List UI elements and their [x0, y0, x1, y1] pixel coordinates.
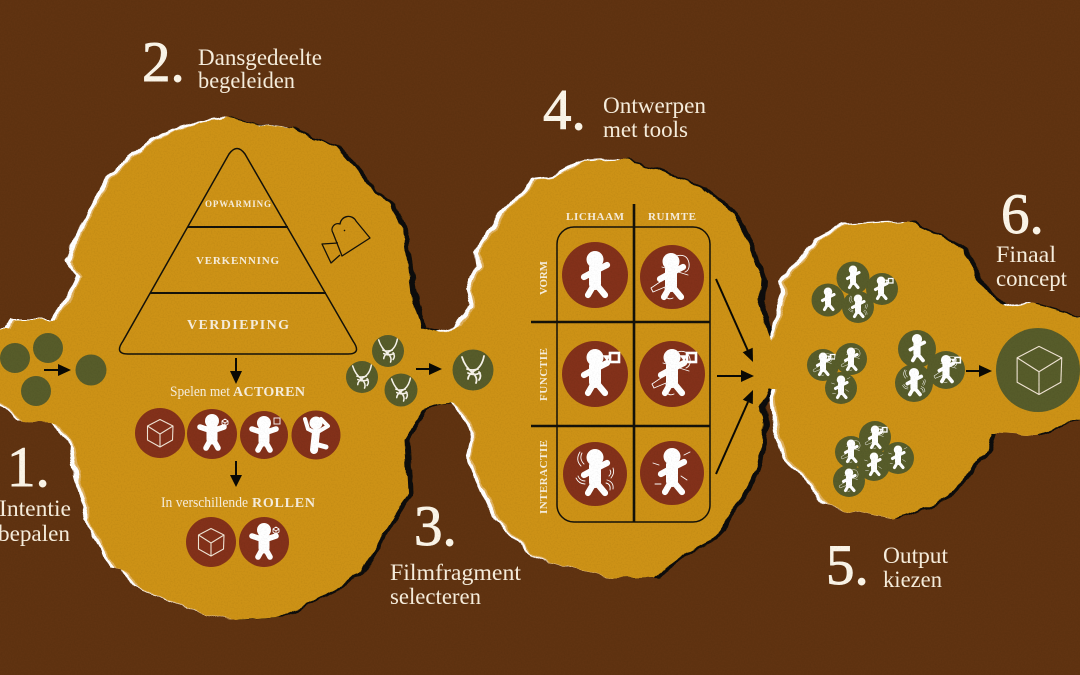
- actor: dancing person: [292, 410, 340, 460]
- arrow: intention: [44, 364, 71, 376]
- arrow: output to concept: [966, 365, 992, 377]
- step 2 heading: begeleiden: [198, 68, 295, 93]
- step 6 heading: Finaal: [996, 242, 1056, 267]
- arrow: pyramid to actors: [230, 358, 242, 384]
- cell: space interaction: [640, 441, 704, 505]
- step 6 heading: 6.: [1001, 183, 1044, 246]
- actor: person with cube: [187, 409, 237, 459]
- step 3 heading: selecteren: [390, 584, 481, 609]
- cell: space function: [639, 341, 705, 407]
- step 4 heading: met tools: [603, 117, 688, 142]
- column label: lichaam: LICHAAM: [566, 211, 625, 223]
- cell: body interaction: [563, 442, 627, 506]
- actor: person with tool: [240, 411, 288, 459]
- step 6 heading: concept: [996, 266, 1068, 291]
- text: spelen met actoren: [170, 384, 305, 400]
- cell: space form: [640, 245, 704, 309]
- row label: functie: FUNCTIE: [538, 348, 550, 401]
- step 3 heading: 3.: [414, 495, 457, 558]
- step 1 heading: Intentie: [0, 496, 71, 521]
- arrow: film fragment: [416, 363, 442, 375]
- output group A: [812, 262, 898, 323]
- text: spelen met actoren: Spelen met: [170, 384, 231, 400]
- actor: object: [135, 408, 185, 458]
- column label: ruimte: RUIMTE: [648, 211, 696, 223]
- text: in verschillende rollen: ROLLEN: [252, 496, 315, 511]
- step 4 heading: Ontwerpen: [603, 93, 707, 118]
- row label: vorm: VORM: [538, 260, 550, 295]
- cell: body function: [562, 341, 628, 407]
- step 2 heading: Dansgedeelte: [198, 45, 322, 70]
- text: in verschillende rollen: [161, 495, 315, 511]
- intention circles: [0, 333, 63, 406]
- pyramid label: verdieping: VERDIEPING: [187, 318, 289, 333]
- step 5 heading: 5.: [826, 534, 869, 597]
- step 3 heading: Filmfragment: [390, 560, 522, 585]
- icon: film camera: [322, 216, 370, 263]
- text: spelen met actoren: ACTOREN: [233, 385, 305, 400]
- step 2 heading: 2.: [142, 31, 185, 94]
- step 5 heading: Output: [883, 543, 949, 568]
- row label: interactie: INTERACTIE: [538, 440, 550, 514]
- cell: body form: [562, 242, 628, 308]
- step 3 heading: [390, 495, 522, 609]
- step 1 heading: 1.: [7, 436, 50, 499]
- pyramid label: opwarming: OPWARMING: [205, 199, 271, 209]
- roles row: [186, 517, 289, 567]
- step 1 heading: [0, 436, 71, 546]
- role: person with cube: [239, 517, 289, 567]
- step 2 heading: [142, 31, 322, 94]
- step 5 heading: [826, 534, 949, 597]
- step 4 heading: [543, 79, 707, 142]
- output group D: [833, 421, 914, 497]
- chosen intention circle: [76, 354, 106, 386]
- central torn-paper shape: [0, 117, 1080, 620]
- step 4 heading: 4.: [543, 79, 586, 142]
- arrow: actors to roles: [230, 461, 242, 487]
- film fragment circles: [346, 335, 418, 406]
- actors row: [135, 408, 340, 460]
- output group C: [895, 330, 965, 402]
- role: object: [186, 517, 236, 567]
- output group B: [807, 343, 867, 404]
- final concept circle with cube: [996, 328, 1080, 412]
- chosen film fragment: [452, 350, 494, 390]
- step 5 heading: kiezen: [883, 567, 942, 592]
- design tools matrix: [531, 204, 710, 522]
- pyramid: [119, 148, 357, 354]
- step 6 heading: [996, 183, 1068, 291]
- arrows: tools to output: [716, 279, 754, 474]
- step 1 heading: bepalen: [0, 521, 71, 546]
- pyramid label: verkenning: VERKENNING: [196, 255, 279, 267]
- text: in verschillende rollen: In verschillende: [161, 495, 248, 511]
